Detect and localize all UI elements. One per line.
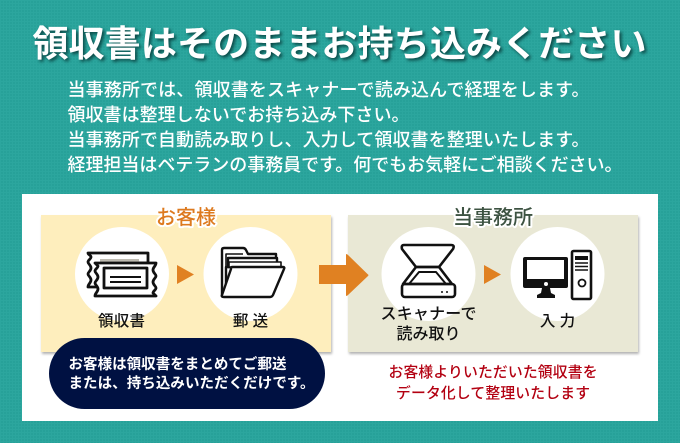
note: customer pill: お客様は領収書をまとめてご郵送 bbox=[68, 355, 287, 373]
icon: folder bbox=[222, 248, 284, 297]
step: mailing bbox=[204, 227, 298, 330]
intro text block: 経理担当はベテランの事務員です。何でもお気軽にご相談ください。 bbox=[68, 155, 622, 175]
label: scanner: スキャナーで bbox=[380, 306, 476, 323]
arrow: big orange bbox=[319, 254, 368, 296]
panel: office bbox=[348, 206, 638, 352]
step: input bbox=[510, 227, 604, 330]
note: office result: データ化して整理いたします bbox=[396, 384, 590, 402]
note: customer pill: または、持ち込みいただくだけです。 bbox=[68, 375, 314, 392]
icon: receipts bbox=[88, 253, 156, 296]
arrow: small triangle 1 bbox=[177, 265, 194, 284]
label: input: 入 力 bbox=[540, 312, 575, 330]
step: receipts bbox=[75, 227, 169, 330]
label: mailing: 郵 送 bbox=[233, 312, 269, 330]
intro text block: 領収書は整理しないでお持ち込み下さい。 bbox=[68, 105, 410, 125]
intro text block bbox=[68, 80, 622, 175]
step: scanner bbox=[380, 227, 476, 343]
heading: office: 当事務所 bbox=[453, 206, 533, 229]
label: receipts: 領収書 bbox=[98, 312, 145, 330]
icon: computer bbox=[523, 251, 591, 299]
note: office result: お客様よりいただいた領収書を bbox=[388, 364, 598, 381]
note: customer pill bbox=[49, 338, 325, 409]
label: scanner bbox=[380, 306, 476, 343]
arrow: small triangle 2 bbox=[484, 265, 501, 284]
intro text block: 当事務所で自動読み取りし、入力して領収書を整理いたします。 bbox=[68, 130, 590, 150]
label: scanner: 読み取り bbox=[396, 325, 461, 343]
icon: scanner bbox=[402, 245, 455, 297]
white main panel bbox=[22, 194, 658, 421]
heading: customer: お客様 bbox=[156, 206, 216, 229]
intro text block: 当事務所では、領収書をスキャナーで読み込んで経理をします。 bbox=[68, 80, 590, 100]
panel: customer bbox=[41, 206, 331, 409]
note: office result bbox=[388, 364, 598, 402]
title: 領収書はそのままお持ち込みください bbox=[32, 23, 646, 64]
